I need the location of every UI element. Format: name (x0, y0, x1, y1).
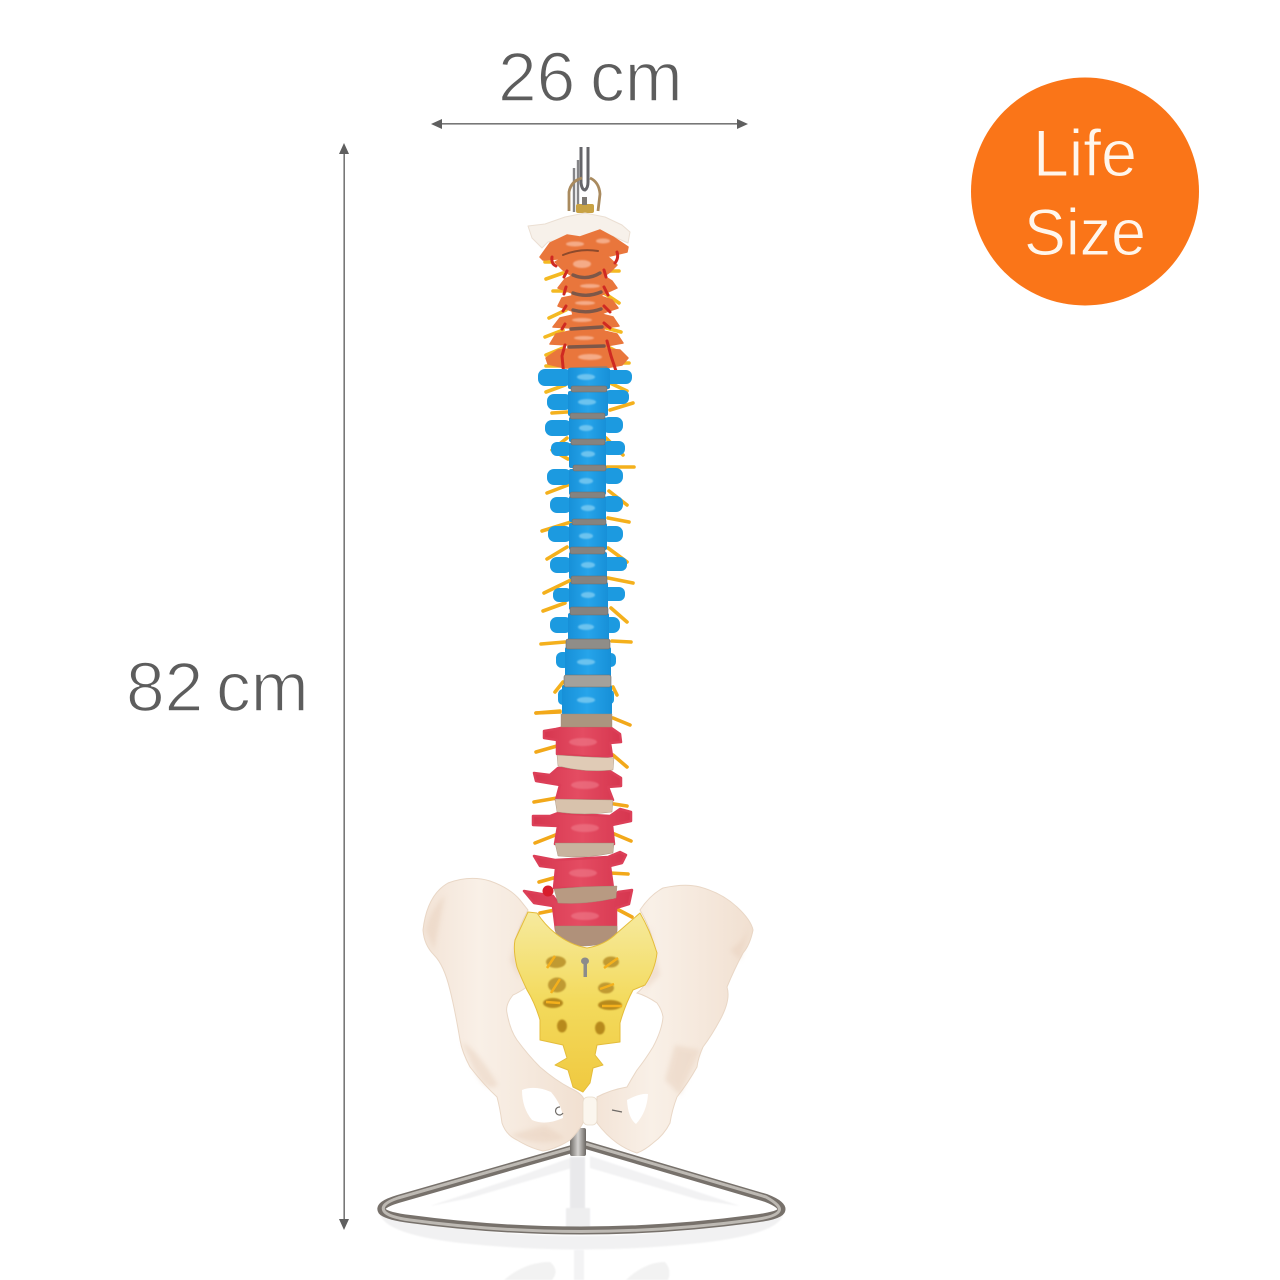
thoracic nerves (536, 403, 634, 713)
right obturator hole (627, 1094, 648, 1124)
width label: 26 cm: cm (590, 38, 683, 116)
chain links (574, 160, 578, 212)
lumbar nerves (534, 712, 632, 917)
lumbar discs (554, 714, 617, 946)
right hip bone (597, 885, 753, 1153)
brass nut (576, 204, 594, 213)
thoracic transverse processes (538, 369, 632, 705)
height label: 82 cm: 82 (126, 648, 203, 726)
pubic symphysis (583, 1097, 597, 1125)
stand (381, 1128, 781, 1232)
cervical vertebrae (540, 230, 628, 368)
cervical nerves (545, 262, 629, 392)
badge: Life Size: Size (1024, 195, 1146, 269)
left obturator hole (522, 1088, 563, 1123)
stand: arms and base ring (381, 1145, 781, 1230)
sacrum nerve strands (546, 956, 622, 1006)
thoracic highlights (577, 374, 596, 703)
chain and hanger (569, 147, 600, 213)
badge: Life Size (971, 78, 1199, 306)
pelvis (423, 878, 753, 1153)
thoracic discs (564, 386, 611, 687)
thoracic vertebral bodies (562, 368, 612, 715)
arrow: width dimension (431, 119, 748, 129)
pubic screws (556, 1107, 622, 1115)
height label: 82 cm: cm (216, 648, 309, 726)
pelvis shading (426, 895, 750, 1142)
stand: centre post (570, 1128, 586, 1156)
lumbar vertebrae (524, 726, 632, 930)
lumbar highlights (569, 738, 599, 920)
sacrum screw (581, 958, 589, 977)
cervical arteries (552, 252, 618, 377)
cervical discs (563, 250, 606, 369)
sacral foramina (543, 956, 622, 1034)
arrow: height dimension (339, 143, 349, 1230)
width label: 26 cm: 26 (498, 38, 575, 116)
spine (524, 213, 634, 946)
stand reflection (380, 1156, 783, 1280)
left hip bone (423, 878, 584, 1151)
red artery bead (542, 886, 554, 896)
badge: Life Size: Life (1033, 116, 1137, 190)
atlas cap (528, 213, 630, 248)
brass ring (569, 178, 600, 211)
sacrum (514, 912, 657, 1092)
cervical highlights (566, 238, 610, 360)
